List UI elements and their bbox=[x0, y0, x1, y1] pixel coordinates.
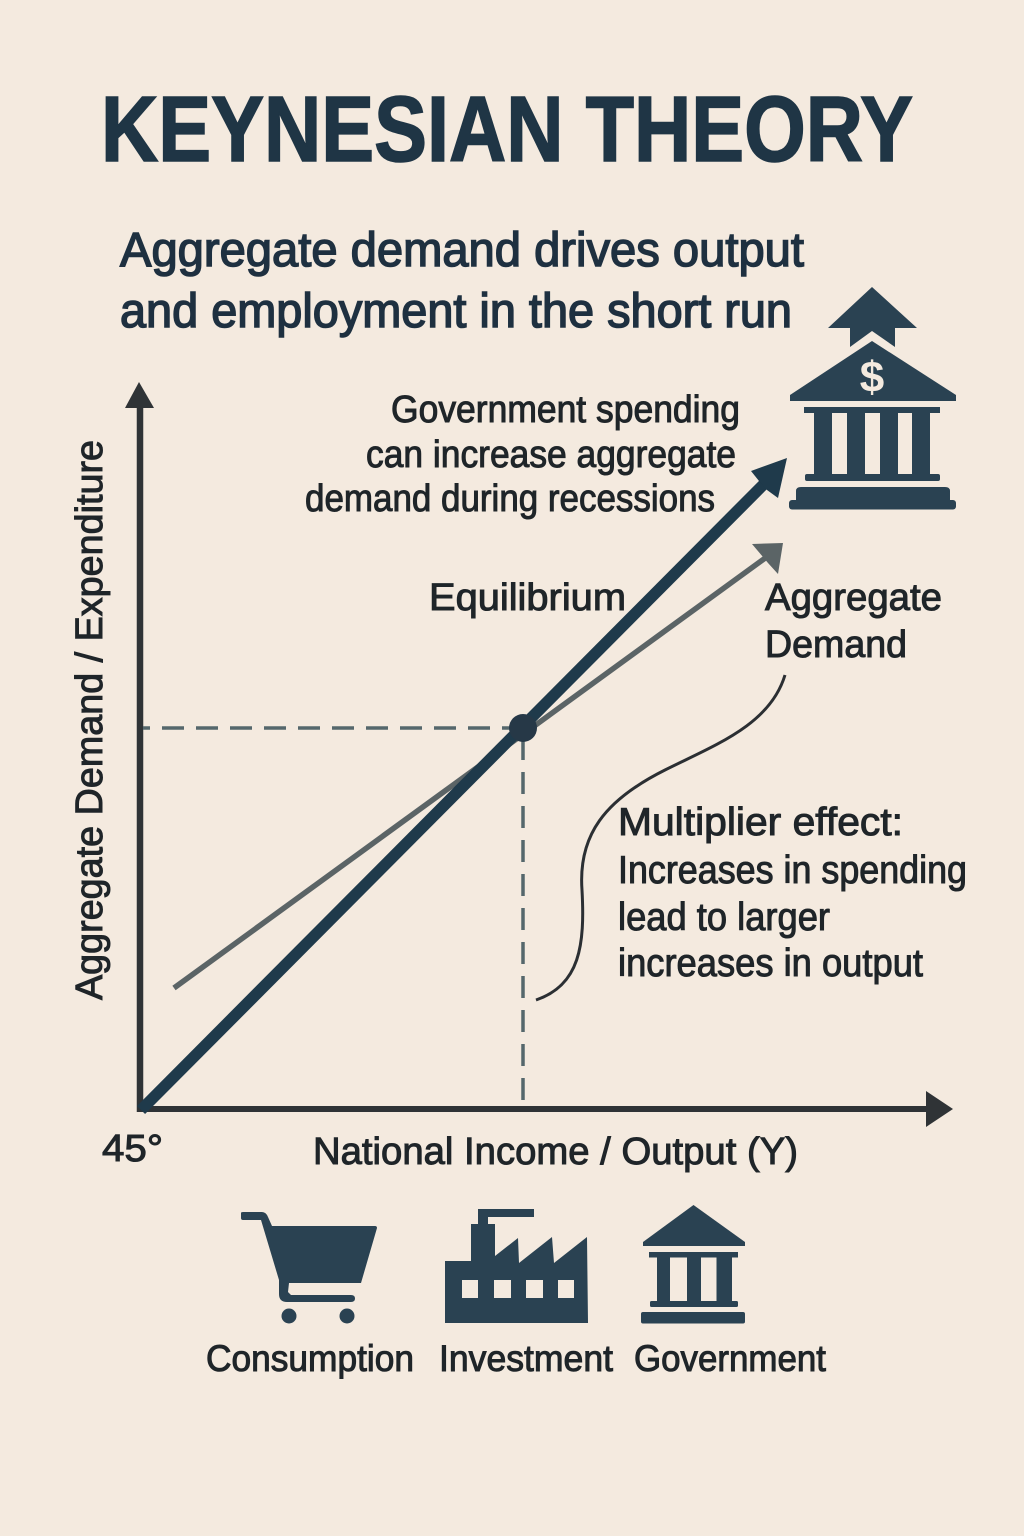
annotation: multiplier effect: lead to larger bbox=[618, 896, 830, 939]
dashed guide horizontal bbox=[143, 726, 512, 730]
label: aggregate demand: Aggregate bbox=[765, 577, 942, 619]
icon: government building bbox=[641, 1205, 745, 1324]
multiplier curve bbox=[536, 675, 785, 1000]
icon: shopping cart bbox=[241, 1212, 377, 1324]
label: investment: Investment bbox=[439, 1338, 614, 1379]
icon: government bank with up arrow bbox=[789, 287, 956, 510]
annotation: government spending: demand during recessions bbox=[305, 478, 715, 520]
annotation: multiplier effect: Multiplier effect: bbox=[618, 801, 903, 844]
annotation: multiplier effect: increases in output bbox=[618, 942, 923, 985]
45 degree line bbox=[141, 458, 787, 1110]
icon: government bank with up arrow: $ bbox=[860, 353, 884, 402]
label: aggregate demand bbox=[765, 577, 942, 666]
label: government: Government bbox=[634, 1338, 827, 1379]
x axis label: National Income / Output (Y) bbox=[313, 1131, 798, 1173]
annotation: multiplier effect: Increases in spending bbox=[618, 849, 967, 892]
subtitle bbox=[120, 224, 804, 338]
annotation: government spending: can increase aggregate bbox=[366, 434, 736, 476]
x axis bbox=[137, 1091, 953, 1127]
label: equilibrium: Equilibrium bbox=[429, 577, 626, 619]
aggregate demand line bbox=[174, 543, 783, 988]
label: consumption: Consumption bbox=[206, 1338, 414, 1379]
y axis label: Aggregate Demand / Expenditure bbox=[69, 440, 111, 1000]
y axis bbox=[125, 382, 154, 1112]
chart: Keynesian cross bbox=[125, 382, 953, 1127]
dashed guide vertical bbox=[521, 738, 525, 1106]
annotation: government spending: Government spending bbox=[391, 389, 740, 431]
annotation: multiplier effect bbox=[618, 801, 967, 985]
label: 45 degrees: 45° bbox=[102, 1128, 163, 1170]
subtitle: and employment in the short run bbox=[120, 285, 792, 338]
subtitle: Aggregate demand drives output bbox=[120, 224, 804, 277]
annotation: government spending bbox=[305, 389, 740, 520]
equilibrium point bbox=[509, 714, 537, 742]
icon: factory bbox=[445, 1209, 588, 1323]
label: aggregate demand: Demand bbox=[765, 624, 907, 666]
